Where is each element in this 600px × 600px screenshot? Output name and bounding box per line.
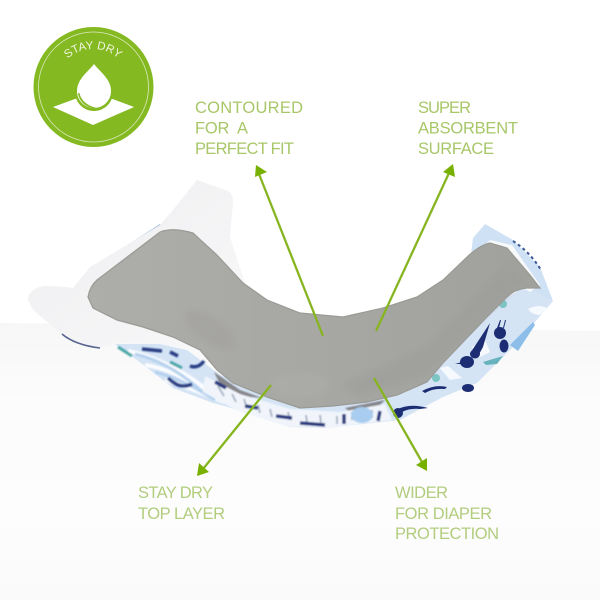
text: super absorbent: SUPER [418, 99, 471, 117]
blue stripe [510, 322, 535, 351]
badge: stay dry [34, 27, 154, 147]
right inner flap edge [470, 240, 540, 292]
text: wider: PROTECTION [395, 525, 499, 543]
elastic blue patch [351, 407, 373, 423]
pad soft shading [179, 262, 525, 398]
text: super absorbent: ABSORBENT [418, 120, 518, 138]
badge label: STAY DRY [64, 41, 123, 58]
text: super absorbent: SURFACE [418, 140, 494, 158]
icon: drop [77, 64, 111, 108]
text: wider: FOR DIAPER [395, 505, 492, 523]
text: stay dry top layer: STAY DRY [138, 484, 213, 502]
blue fold shading [135, 354, 215, 400]
diaper [28, 180, 553, 428]
text: contoured [195, 99, 303, 158]
back shell strip left [88, 224, 175, 290]
badge disc [34, 27, 154, 147]
background floor [0, 323, 600, 600]
lower shell [115, 287, 553, 428]
arrow: wider [374, 378, 427, 471]
left tab [28, 180, 300, 400]
arrow: stay dry top layer [197, 385, 271, 476]
text: contoured: FOR A [195, 120, 248, 138]
elastic shade marks [218, 386, 372, 424]
elastic navy prints [215, 382, 380, 425]
ant prints [393, 320, 508, 418]
text: contoured: PERFECT FIT [195, 140, 294, 158]
elastic ruffle [203, 376, 392, 428]
right back elastic marks [513, 241, 541, 270]
icon: drop crescent [78, 93, 97, 108]
dark shadow above elastic [214, 372, 385, 412]
right back shell [470, 224, 553, 301]
text: contoured: CONTOURED [195, 99, 303, 117]
arrow: contoured [255, 165, 323, 336]
grey pad [88, 230, 540, 408]
text: stay dry top layer: TOP LAYER [138, 505, 225, 523]
arrow: super absorbent [376, 164, 455, 331]
text: super absorbent [418, 99, 518, 158]
white print patches [440, 306, 548, 380]
icon: surface [53, 92, 134, 125]
navy prints on lower-left shell [142, 349, 204, 386]
teal right prints [483, 356, 503, 365]
text: wider [395, 484, 499, 543]
badge ring [38, 32, 148, 142]
text: stay dry top layer [138, 484, 225, 523]
tab lower navy edge [62, 334, 100, 348]
folds on lower-left shell [118, 347, 392, 428]
text: wider: WIDER [395, 484, 448, 502]
icon: drop outline [75, 62, 113, 111]
teal prints [118, 347, 182, 368]
